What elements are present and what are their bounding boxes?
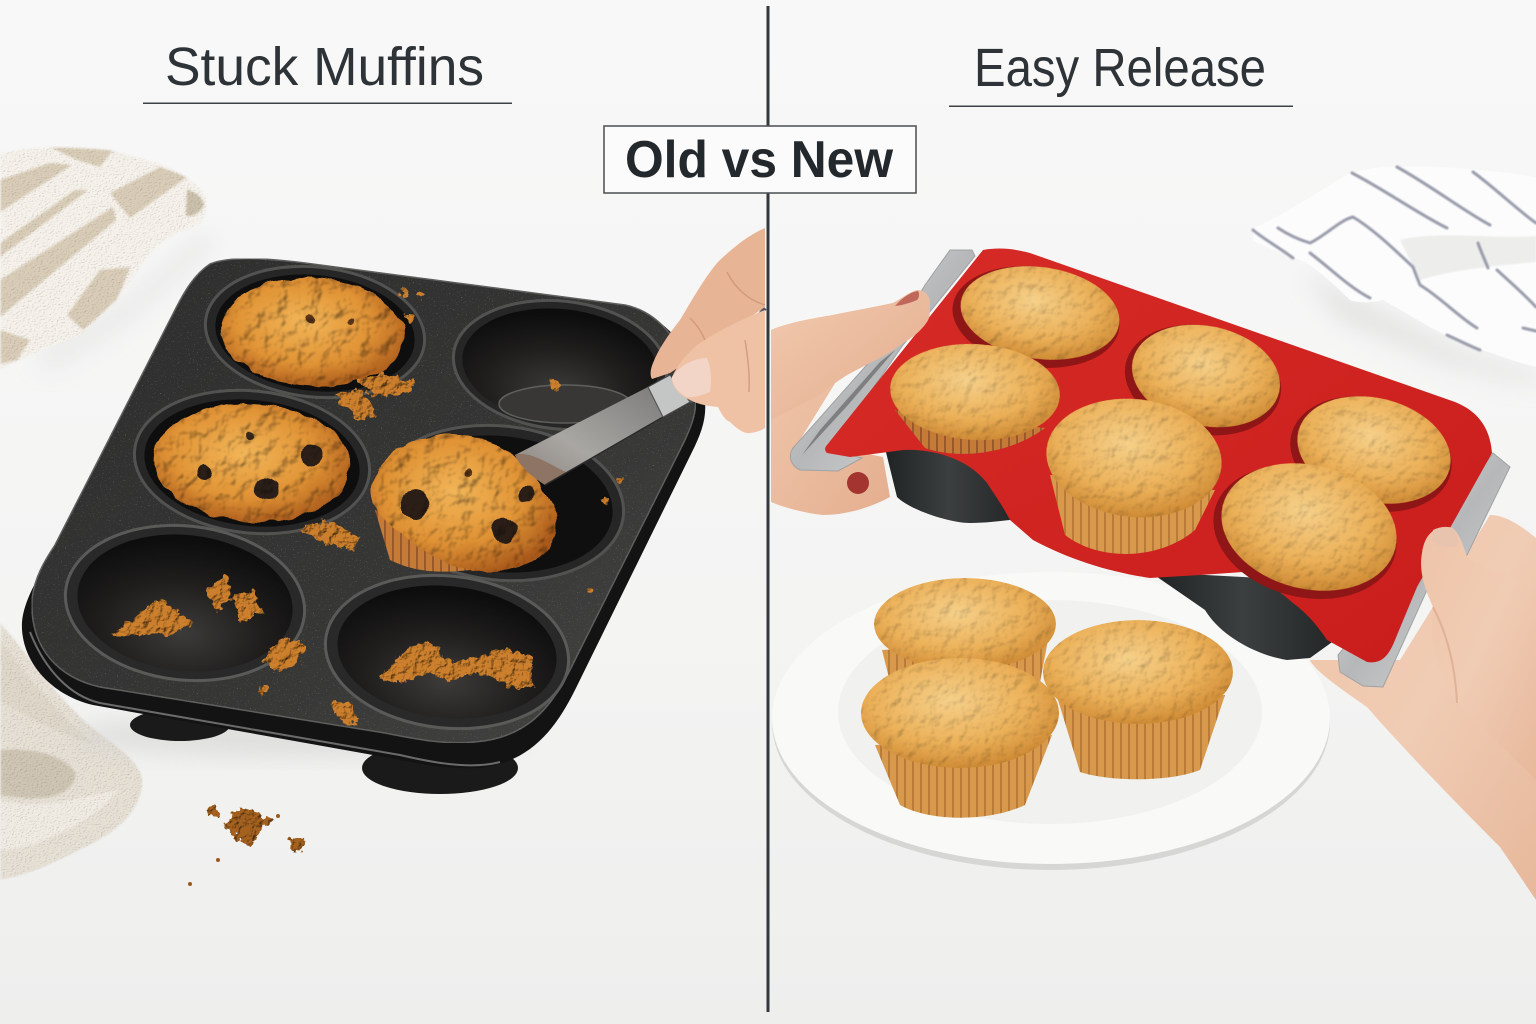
- towel: bottom left beige: [0, 622, 143, 880]
- pan feet: [130, 709, 518, 794]
- muffin on plate: right: [1043, 620, 1233, 779]
- white plate: [772, 572, 1330, 870]
- spatula knife: [515, 308, 765, 485]
- silicone release tray: [790, 249, 1510, 687]
- tray muffin: left: [888, 340, 1062, 454]
- muffin on plate: front: [861, 658, 1059, 818]
- right heading: Easy Release: Easy Release: [974, 38, 1266, 98]
- crumbs inside old pan: [112, 288, 623, 726]
- towel: top right white with blue stripes: [1253, 167, 1536, 385]
- metal frame left slot: [802, 350, 895, 455]
- thumbnail: [672, 358, 711, 397]
- metal frame left handle: [790, 250, 975, 471]
- pan cup: top right: [447, 290, 673, 440]
- tray muffin: centre: [1040, 390, 1228, 554]
- stuck muffin: middle left: [150, 399, 354, 527]
- thumb and palm: [672, 310, 765, 433]
- pan cup: bottom left: [58, 514, 312, 692]
- pan cup: middle left: [127, 379, 377, 545]
- pan cup: top left: [199, 256, 431, 408]
- left thumb over frame: [771, 290, 930, 420]
- pan body: [22, 261, 705, 768]
- muffin being pried out: [370, 434, 557, 572]
- metal frame right handle: [1338, 453, 1510, 687]
- stuck muffin: top left: [217, 273, 407, 391]
- right thumb and palm over frame: [1421, 527, 1536, 780]
- crumbs on table: [207, 805, 305, 852]
- muffin on plate: back: [874, 578, 1056, 682]
- red tray body: [825, 249, 1492, 662]
- tray muffin: lower right: [1199, 445, 1411, 618]
- tray muffin: right: [1278, 380, 1464, 528]
- right hand base behind frame: [1310, 515, 1536, 900]
- towel: top left beige striped: [0, 146, 215, 370]
- center divider: [766, 6, 770, 1012]
- finger creases: [690, 272, 765, 392]
- tray muffin: top: [946, 256, 1126, 378]
- left heading: Stuck Muffins: Stuck Muffins: [165, 37, 484, 97]
- tray muffin: upper middle: [1114, 311, 1292, 449]
- left hand base behind frame: [771, 303, 903, 515]
- pan cup: bottom right: [318, 564, 576, 740]
- tiny crumb specks: [188, 814, 280, 886]
- center label: Old vs New: Old vs New: [625, 131, 894, 189]
- muffin pan: old dark tin: [22, 256, 705, 794]
- pan cup: middle right: [369, 413, 631, 593]
- hand holding knife: [651, 228, 765, 433]
- dark cups under tray: [883, 440, 1335, 660]
- index finger and back of hand: [651, 228, 765, 379]
